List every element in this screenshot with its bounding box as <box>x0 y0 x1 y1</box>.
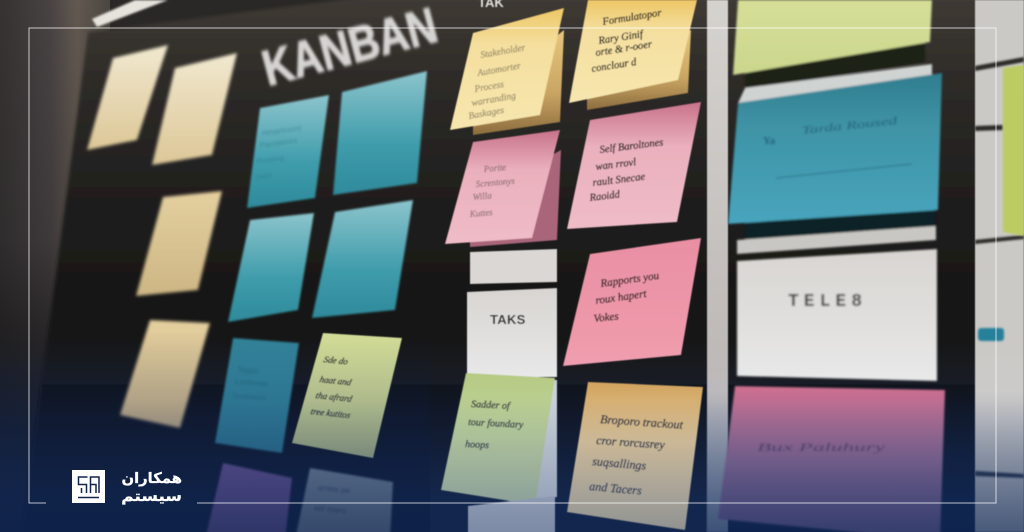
note: green handwritten: tree kutitos <box>309 406 352 420</box>
card: white strip <box>470 249 557 284</box>
note: teal big: Tarda Roused <box>801 115 899 137</box>
handwriting on tan bottom: and Tacers <box>589 479 643 498</box>
card: TELE8: TELE8 <box>788 292 867 312</box>
note: cream 2 <box>152 53 237 165</box>
handwriting on pink centre: Screntonys <box>475 176 516 189</box>
board top light bar <box>92 0 168 27</box>
navy tint left side <box>0 330 430 532</box>
note: purple <box>205 463 292 532</box>
logo wordmark <box>121 470 182 505</box>
handwriting on pink right upper: Self Baroltones <box>599 137 664 156</box>
divider column: light strip <box>707 0 728 532</box>
note: teal 2 <box>333 71 427 195</box>
note: grey bottom: ute tours <box>314 502 347 515</box>
handwriting on yellow centre: Process <box>473 80 505 95</box>
handwriting on green centre: tour foundary <box>468 417 524 431</box>
right edge white panels <box>975 0 1024 532</box>
note: green handwritten: Sde do <box>322 354 350 367</box>
faint writing on teal 1: Proning <box>256 153 285 166</box>
note: grey bottom <box>295 468 393 532</box>
note: green handwritten: tha afrard <box>314 390 354 404</box>
faint writing on teal 5: Sustnerto <box>232 391 267 402</box>
note: green edge <box>1003 65 1024 236</box>
strip under teal note <box>737 226 936 254</box>
note: yellow centre <box>450 8 564 130</box>
handwriting on yellow right: Formulatopor <box>601 8 663 28</box>
handwriting on yellow centre: Automorter <box>476 61 522 79</box>
handwriting on pink right upper: wan rrovl <box>595 157 637 173</box>
note: teal 5 <box>215 338 299 453</box>
handwriting on pink right upper: Raoidd <box>588 189 621 204</box>
handwriting on pink centre <box>468 162 516 219</box>
note: pink right upper <box>567 102 701 229</box>
faint writing on teal 5 <box>232 365 268 402</box>
wall lower shade <box>0 0 110 532</box>
handwriting on tan bottom: suqsallings <box>592 454 647 473</box>
note: pink right lower <box>563 238 701 366</box>
panel: cream notes column <box>87 45 237 428</box>
note: green handwritten: haat and <box>318 374 353 387</box>
handwriting on yellow centre: Baskages <box>468 106 505 122</box>
teal tag on edge <box>978 328 1004 341</box>
note: green top <box>733 0 932 75</box>
note: teal big shadow <box>745 205 935 240</box>
navy screen overlay <box>0 340 1024 532</box>
note: green centre <box>441 373 555 505</box>
right edge: dark rails <box>975 57 1024 478</box>
handwriting on pink centre: Kuttes <box>468 207 494 219</box>
logo <box>72 470 182 505</box>
handwriting on pink right lower: roux hapert <box>595 288 648 307</box>
note: cream 4 <box>120 320 210 428</box>
handwriting on yellow right: Rary Ginif <box>597 29 646 47</box>
faint writing on teal 1: Hmartroont <box>261 123 303 138</box>
note: teal big: Ya <box>763 135 776 147</box>
navy tint overlay <box>0 400 1024 532</box>
board title: KANBAN: KANBAN <box>257 0 443 97</box>
note: yellow right flap <box>587 30 691 110</box>
handwriting on pink right lower: Vokes <box>593 310 619 325</box>
faint writing on teal 1: Pacstemrs <box>259 136 298 150</box>
handwriting on green centre <box>465 399 524 451</box>
note: green top shadow <box>745 40 925 90</box>
handwriting on yellow right: conclour d <box>591 57 638 75</box>
faint writing on teal 5: Tegan <box>237 365 259 376</box>
card: white under green <box>467 380 557 500</box>
note: cream 1 <box>87 45 168 150</box>
handwriting on pink right upper <box>588 137 664 204</box>
handwriting on pink centre: Porite <box>482 162 507 174</box>
handwriting on pink right upper: rault Snecae <box>592 172 646 189</box>
note: teal 3 <box>228 213 314 322</box>
note: green handwritten <box>292 333 402 458</box>
note: yellow centre flap <box>473 30 564 135</box>
handwriting on green centre: Sadder of <box>471 399 511 412</box>
note: teal 4 <box>312 200 413 318</box>
handwriting on pink right lower: Rapports you <box>599 270 660 290</box>
card: TAKS: TAKS <box>490 312 526 327</box>
note: grey bottom: arnos on <box>318 482 351 495</box>
note: yellow right <box>569 0 697 103</box>
handwriting on yellow right: orte & r-ooer <box>595 39 654 59</box>
note: pink big <box>718 386 945 532</box>
panel: centre-right column notes <box>563 0 703 530</box>
note: pink big: Bux Paluhury <box>757 440 886 454</box>
handwriting on green centre: hoops <box>465 439 489 451</box>
handwriting on pink centre: Willa <box>472 190 493 202</box>
card: TAKS <box>467 288 557 377</box>
wall background <box>0 0 110 532</box>
note: pink centre <box>445 130 560 244</box>
note: cream 3 <box>136 191 222 296</box>
handwriting on yellow centre: warranding <box>471 91 517 109</box>
icon: logo mark <box>72 470 105 503</box>
handwriting on yellow right <box>591 8 663 75</box>
handwriting on tan bottom: Broporo trackout <box>600 412 684 432</box>
panel: teal notes column <box>205 71 427 532</box>
note: teal big <box>728 73 942 224</box>
handwriting on tan bottom: cror rorcusrey <box>596 433 666 452</box>
strip behind teal note <box>738 64 932 103</box>
note: tan bottom <box>567 382 703 530</box>
handwriting on yellow centre <box>468 43 527 122</box>
panel: right column <box>718 0 945 532</box>
panel: centre-left column notes <box>441 8 564 532</box>
note: teal 1 <box>247 95 329 208</box>
handwriting on tan bottom <box>589 412 684 498</box>
handwriting on pink right lower <box>593 270 660 325</box>
handwriting on yellow centre: Stakeholder <box>480 43 527 61</box>
navy tint right column <box>707 390 1024 532</box>
card: small white lower <box>468 496 555 532</box>
logo wordmark: همکاران <box>121 470 182 487</box>
faint writing on teal 5: Lontonas <box>235 377 268 388</box>
faint writing on teal 1: Swirl <box>254 171 273 182</box>
card: TELE8 <box>737 249 937 381</box>
logo wordmark: سیستم <box>121 487 182 505</box>
note: pink centre flap <box>470 150 561 247</box>
faint writing on teal 1 <box>254 123 303 182</box>
